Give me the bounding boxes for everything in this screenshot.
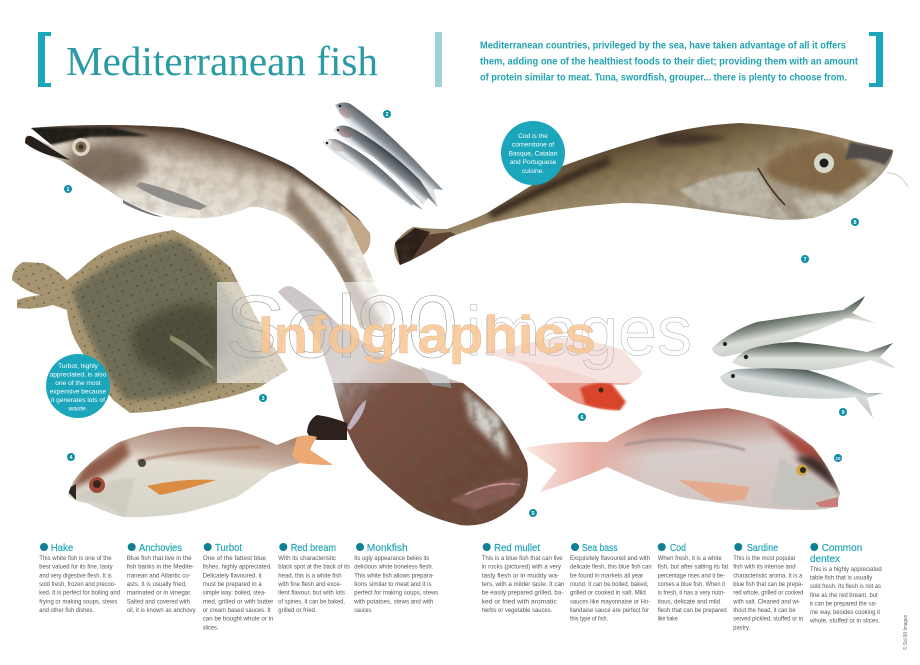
intro text: them, adding one of the healthiest foods to their diet; providing them with an amount bbox=[480, 56, 859, 68]
column 10: common dentex: me way, besides cooking it bbox=[810, 609, 880, 616]
fish 10: common dentex bbox=[525, 408, 840, 510]
column 3: turbot: One of the fattest blue bbox=[203, 555, 266, 562]
column 4: red bream bbox=[277, 542, 351, 614]
column 3: turbot: must be prepared in a bbox=[203, 581, 262, 588]
column 2: anchovies: Salted and covered with bbox=[127, 598, 190, 605]
column 8: cod: flesh that can be prepared bbox=[658, 607, 727, 614]
column 3: turbot: or cream based sauces. It bbox=[203, 607, 271, 614]
column 7: sea bass: this type of fish. bbox=[570, 616, 608, 623]
callout: cod: Basque, Catalan bbox=[509, 150, 558, 157]
fish 3: turbot bbox=[12, 230, 288, 413]
column 7: sea bass: Sea bass bbox=[582, 542, 618, 554]
header bbox=[38, 32, 883, 87]
column 3: turbot: can be bought whole or in bbox=[203, 616, 274, 623]
column 7: sea bass: sauces like mayonnaise or Ho- bbox=[570, 598, 650, 605]
column 2: anchovies bbox=[127, 542, 197, 614]
column 1: hake: sold fresh, frozen and precoo- bbox=[39, 581, 116, 588]
number marker 1 bbox=[64, 185, 72, 193]
column 10: common dentex: sold fresh. Its flesh is not as bbox=[810, 583, 882, 590]
column 7: sea bass: delicate flesh, this blue fish can bbox=[570, 564, 652, 571]
fish 2: anchovies bbox=[322, 102, 443, 210]
column 6: red mullet: This is a blue fish that can live bbox=[482, 555, 563, 562]
column 9: sardine: characteristic aroma. It is a bbox=[733, 572, 803, 579]
column 6: red mullet: be easily prepared grilled, ba- bbox=[482, 590, 563, 597]
column 3: turbot: fishes, highly appreciated. bbox=[203, 564, 272, 571]
column 6: red mullet: ters, with a milder taste. It can bbox=[482, 581, 565, 588]
column 4: red bream: llent flavour, but with lots bbox=[278, 590, 346, 597]
fish 4: red bream bbox=[68, 426, 333, 518]
column 1: hake bbox=[39, 542, 120, 614]
number marker 2: 2 bbox=[385, 112, 389, 118]
column 3: turbot bbox=[203, 542, 274, 631]
column 1: hake: This white fish is one of the bbox=[39, 555, 112, 562]
number marker 2 bbox=[383, 110, 391, 118]
number marker 1: 1 bbox=[66, 187, 70, 193]
column 8: cod: When fresh, it is a white bbox=[658, 555, 722, 562]
column 8: cod: is fresh, it has a very nutri- bbox=[658, 590, 725, 597]
fish 5: monkfish bbox=[270, 280, 535, 530]
column 10: common dentex: it can be prepared the sa- bbox=[810, 600, 877, 607]
column 9: sardine: This is the most popular bbox=[733, 555, 796, 562]
column 9: sardine: thout the head, it can be bbox=[733, 607, 796, 614]
callout: cod: cornerstone of bbox=[512, 142, 554, 149]
column 10: common dentex: table fish that is usually bbox=[810, 575, 873, 582]
copyright: © Sol 90 Images bbox=[902, 615, 909, 650]
column 1: hake: and very digestive flesh. It is bbox=[39, 572, 112, 579]
column 5: monkfish: delicious white boneless flesh. bbox=[354, 564, 433, 571]
column 8: cod: comes a blue fish. When it bbox=[658, 581, 725, 588]
column 2: anchovies: asts. It is usually fried, bbox=[127, 581, 187, 588]
column 4: red bream: black spot at the back of its bbox=[278, 564, 351, 571]
column 6: red mullet: tasty flesh or in muddy wa- bbox=[482, 572, 559, 579]
number marker 3 bbox=[259, 394, 267, 402]
column 4: red bream: of spines. It can be baked, bbox=[278, 598, 345, 605]
callout: turbot: it generates lots of bbox=[51, 397, 105, 404]
column 5: monkfish: Monkfish bbox=[367, 542, 408, 554]
callout: cod: Cod is the bbox=[518, 133, 548, 140]
column 10: common dentex: Common bbox=[822, 542, 862, 554]
column 10: common dentex: fine as the red bream, but bbox=[810, 592, 878, 599]
column 4: red bream: grilled or fried. bbox=[278, 607, 317, 614]
callout: turbot: Turbot, highly bbox=[58, 363, 99, 370]
column 5: monkfish: with potatoes, stews and with bbox=[353, 598, 434, 605]
watermark: Infographics bbox=[258, 306, 596, 365]
callout: turbot: expensive because bbox=[50, 388, 107, 396]
number marker 7 bbox=[801, 255, 809, 263]
column 3: turbot: Delicately flavoured, it bbox=[203, 572, 262, 579]
column 8: cod: Cod bbox=[670, 542, 686, 554]
divider bar bbox=[435, 32, 442, 87]
column 1: hake: ked. It is perfect for boiling and bbox=[39, 590, 120, 597]
column 8: cod: tious, delicate and mild bbox=[658, 598, 720, 605]
column 3: turbot: med, grilled or with butter bbox=[203, 598, 274, 605]
column 8: cod: like hake. bbox=[658, 616, 679, 623]
column 6: red mullet: Red mullet bbox=[494, 542, 540, 554]
column 5: monkfish: perfect for making soups, stews bbox=[354, 590, 439, 597]
intro text bbox=[480, 40, 859, 84]
callout: turbot: one of the most bbox=[55, 380, 101, 387]
fish 1: hake bbox=[25, 125, 390, 330]
callout: turbot: appreciated, is also bbox=[50, 372, 107, 378]
column 6: red mullet bbox=[482, 542, 565, 614]
column 3: turbot: Turbot bbox=[215, 542, 242, 554]
column 9: sardine: with salt. Cleaned and wi- bbox=[732, 598, 800, 605]
number marker 10: 10 bbox=[835, 456, 841, 461]
fish 9: sardine group bbox=[712, 296, 897, 418]
column 3: turbot: slices. bbox=[203, 624, 219, 631]
number marker 6 bbox=[578, 413, 586, 421]
column 1: hake: frying or making soups, stews bbox=[39, 598, 118, 605]
column 2: anchovies: Blue fish that live in the bbox=[127, 555, 192, 562]
intro text: Mediterranean countries, privileged by the sea, have taken advantage of all it offers bbox=[480, 40, 846, 52]
callout: cod bbox=[501, 121, 565, 185]
column 4: red bream: head, this is a white fish bbox=[278, 572, 342, 579]
column 2: anchovies: marinated or in vinegar. bbox=[127, 590, 192, 597]
column 7: sea bass: round. It can be boiled, baked, bbox=[570, 581, 648, 588]
column 9: sardine: red whole, grilled or cooked bbox=[733, 590, 804, 597]
callout: turbot: waste. bbox=[67, 406, 88, 412]
column 10: common dentex: This is a highly appreciated bbox=[810, 566, 882, 573]
column 9: sardine: pastry. bbox=[733, 624, 750, 631]
number marker 7: 7 bbox=[803, 257, 807, 263]
column 8: cod bbox=[658, 542, 729, 623]
watermark: images bbox=[466, 292, 692, 370]
number marker 5 bbox=[529, 509, 537, 517]
column 3: turbot: simple way: boiled, stea- bbox=[203, 590, 266, 597]
number marker 6: 6 bbox=[580, 415, 584, 421]
column 2: anchovies: fish banks in the Medite- bbox=[127, 564, 194, 571]
column 5: monkfish bbox=[353, 542, 439, 614]
column 6: red mullet: ked or fried with aromatic bbox=[482, 598, 557, 605]
column 9: sardine: fish with its intense and bbox=[733, 564, 796, 571]
number marker 4 bbox=[67, 453, 75, 461]
number marker 3: 3 bbox=[261, 396, 265, 402]
column 5: monkfish: Its ugly appearance belies its bbox=[354, 555, 430, 562]
column 7: sea bass: grilled or cooked in salt. Mild bbox=[570, 590, 646, 597]
column 1: hake: and other fish dishes. bbox=[39, 607, 94, 614]
column 2: anchovies: Anchovies bbox=[139, 542, 182, 554]
column 7: sea bass: llandaise sauce are perfect for bbox=[570, 607, 650, 614]
column 6: red mullet: in rocks (pictured) with a very bbox=[482, 564, 562, 571]
number marker 10 bbox=[834, 454, 842, 462]
number marker 4: 4 bbox=[69, 455, 73, 461]
number marker 9 bbox=[839, 408, 847, 416]
icon: left bracket bbox=[38, 32, 51, 87]
column 2: anchovies: oil, it is known as anchovy. bbox=[127, 607, 197, 614]
column 4: red bream: With its characteristic bbox=[278, 555, 337, 562]
title: Mediterranean fish bbox=[66, 38, 378, 84]
callout: turbot bbox=[46, 354, 110, 418]
column 8: cod: percentage rises and it be- bbox=[658, 572, 725, 579]
column 2: anchovies: rranean and Atlantic co- bbox=[127, 572, 191, 579]
column 4: red bream: Red bream bbox=[291, 542, 336, 554]
column 7: sea bass: Exquisitely flavoured and with bbox=[570, 555, 650, 562]
callout: cod: and Portuguese bbox=[510, 159, 557, 166]
column 1: hake: best valued for its fine, tasty bbox=[39, 564, 113, 571]
number marker 9: 9 bbox=[841, 410, 845, 416]
column 7: sea bass: be found in markets all year bbox=[570, 572, 644, 579]
icon: right bracket bbox=[869, 32, 883, 87]
column 5: monkfish: tions similar to meat and it is bbox=[354, 581, 432, 588]
column 4: red bream: with fine flesh and exce- bbox=[277, 581, 342, 588]
column 1: hake: Hake bbox=[51, 542, 73, 554]
intro text: of protein similar to meat. Tuna, swordfish, grouper... there is plenty to choose from. bbox=[480, 72, 847, 84]
column 5: monkfish: This white fish allows prepara- bbox=[354, 572, 434, 579]
number marker 5: 5 bbox=[531, 511, 535, 517]
column 9: sardine: Sardine bbox=[747, 542, 778, 554]
column 7: sea bass bbox=[570, 542, 652, 623]
number marker 8 bbox=[851, 218, 859, 226]
column 8: cod: fish, but after salting its fat bbox=[658, 564, 729, 571]
column 10: common dentex: whole, stuffed or in slices. bbox=[809, 618, 880, 625]
column 6: red mullet: herbs or vegetable sauces. bbox=[482, 607, 553, 614]
fish 6: red mullet bbox=[483, 337, 643, 410]
column 9: sardine bbox=[732, 542, 804, 631]
fish 8: cod bbox=[390, 115, 908, 270]
column 9: sardine: served pickled, stuffed or in bbox=[733, 616, 804, 623]
number marker 8: 8 bbox=[853, 220, 857, 226]
callout: cod: cuisine. bbox=[522, 168, 544, 175]
column 10: common dentex: dentex bbox=[810, 553, 841, 565]
column 9: sardine: blue fish that can be prepa- bbox=[733, 581, 803, 588]
column 5: monkfish: sauces. bbox=[354, 607, 373, 614]
watermark bbox=[217, 277, 697, 383]
column 10: common dentex bbox=[809, 542, 882, 625]
watermark: Sol90 bbox=[225, 277, 458, 376]
